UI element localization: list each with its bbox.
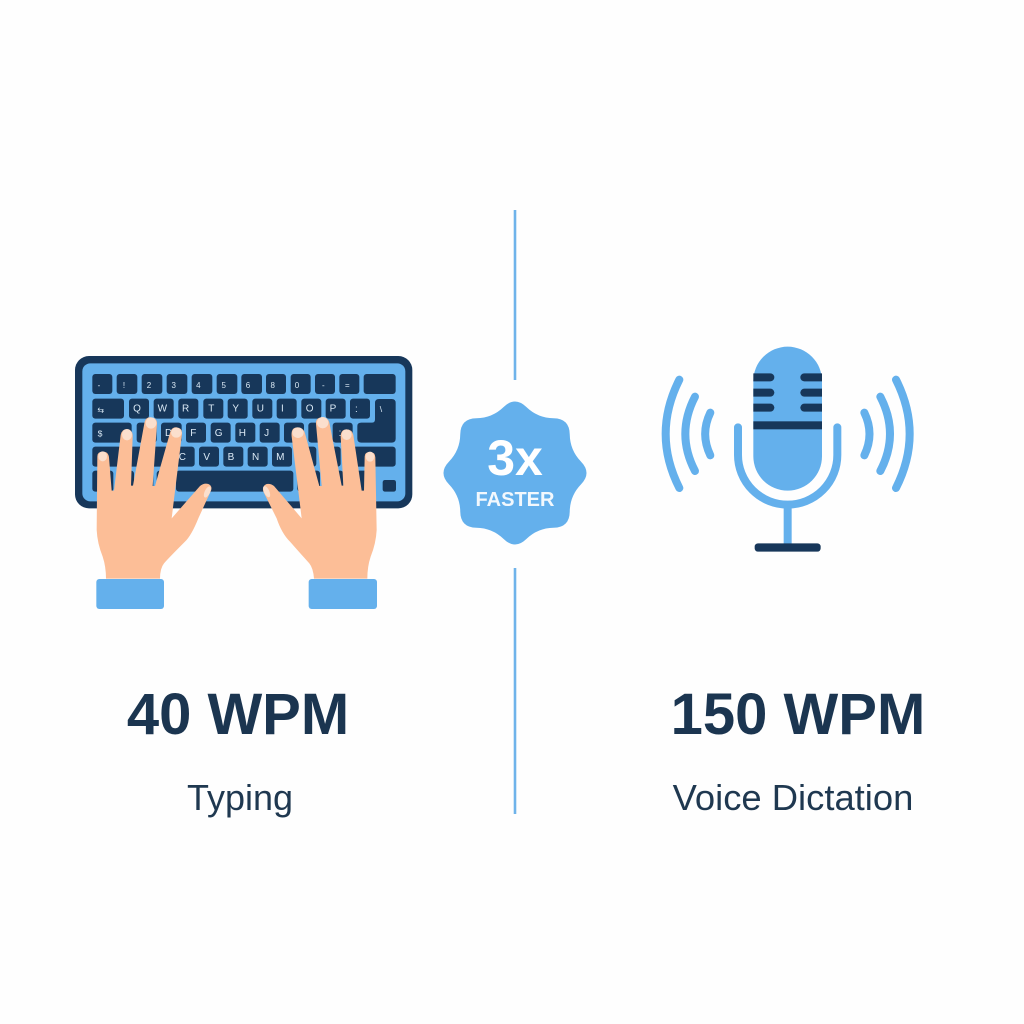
microphone base	[755, 543, 821, 552]
badge number: 3x	[487, 430, 543, 486]
keyboard key labels: P	[330, 403, 337, 414]
keyboard key labels: C	[179, 452, 186, 463]
keyboard key labels: -	[322, 381, 325, 390]
right hand fingernails	[262, 417, 374, 498]
keyboard key labels: W	[158, 403, 168, 414]
keyboard key labels: V	[203, 452, 210, 463]
label: voice dictation: Voice Dictation	[673, 777, 913, 818]
badge caption: FASTER	[476, 489, 555, 511]
keyboard keys	[92, 374, 396, 492]
keyboard key labels: 5	[221, 381, 226, 390]
keyboard key labels: I	[281, 403, 284, 414]
microphone capsule	[753, 347, 822, 491]
keyboard key labels: ⇆	[97, 406, 104, 415]
keyboard key labels: N	[252, 452, 259, 463]
keyboard key labels: :	[355, 404, 358, 415]
keyboard key labels: D	[165, 428, 172, 439]
keyboard key labels: O	[306, 403, 314, 414]
label: typing: Typing	[187, 777, 293, 818]
badge shape	[443, 401, 587, 545]
panel: typing illustration	[75, 356, 412, 609]
right hand	[262, 417, 377, 609]
keyboard key labels: Y	[232, 403, 239, 414]
keyboard key labels: U	[257, 403, 264, 414]
divider: lower line	[514, 568, 516, 814]
keyboard key labels: \	[380, 404, 383, 414]
keyboard key labels: T	[208, 403, 214, 414]
stat: voice speed: 150 WPM	[671, 682, 925, 747]
keyboard deck	[82, 363, 405, 501]
divider: upper line	[514, 210, 516, 380]
keyboard key labels: 0	[295, 381, 300, 390]
keyboard key labels: :	[339, 428, 341, 439]
keyboard key labels: F	[190, 428, 196, 439]
left hand	[96, 417, 212, 609]
keyboard key labels	[97, 381, 383, 463]
keyboard key labels: 3	[171, 381, 176, 390]
microphone cradle and stem	[738, 427, 837, 545]
microphone grille bars	[753, 373, 822, 429]
keyboard key labels: G	[215, 428, 223, 439]
panel: microphone illustration	[666, 347, 910, 552]
right hand shape	[263, 417, 377, 579]
keyboard key labels: -	[98, 381, 101, 390]
sound waves	[666, 380, 910, 488]
keyboard key labels: 6	[246, 381, 251, 390]
keyboard key labels: B	[228, 452, 235, 463]
badge: 3x faster	[443, 401, 587, 545]
keyboard frame	[75, 356, 412, 508]
keyboard key labels: 8	[270, 381, 275, 390]
left sleeve cuff	[96, 579, 164, 609]
keyboard key labels: !	[123, 381, 125, 390]
keyboard key labels: H	[239, 428, 246, 439]
left hand fingernails	[98, 417, 212, 499]
right sleeve cuff	[309, 579, 377, 609]
keyboard key labels: Q	[133, 403, 141, 414]
keyboard key labels: J	[264, 428, 269, 439]
keyboard key labels: 2	[147, 381, 152, 390]
left hand shape	[97, 417, 211, 579]
stat: typing speed: 40 WPM	[127, 682, 349, 747]
keyboard key labels: 4	[196, 381, 201, 390]
keyboard key labels: $	[98, 429, 103, 439]
keyboard key labels: R	[182, 403, 189, 414]
keyboard key labels: =	[345, 381, 350, 390]
keyboard key labels: M	[276, 452, 284, 463]
